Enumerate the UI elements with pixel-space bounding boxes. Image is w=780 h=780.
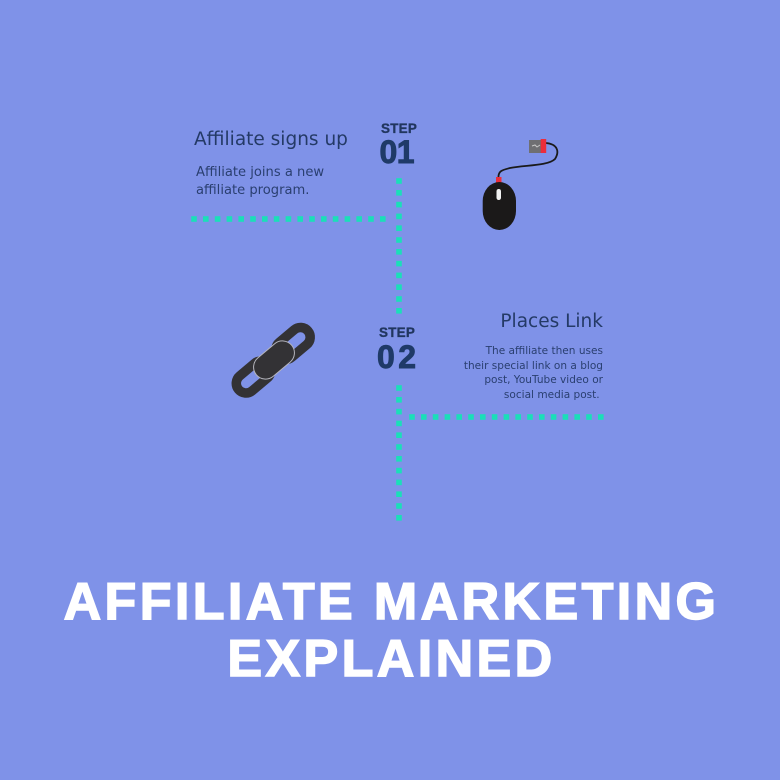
icon: chain link xyxy=(232,322,315,398)
step 1 description: Affiliate joins a new xyxy=(196,164,324,180)
title: AFFILIATE MARKETING xyxy=(64,572,719,630)
step 1 description xyxy=(196,164,324,198)
step 2 label: STEP xyxy=(379,325,415,340)
title xyxy=(64,572,719,688)
step 2 description: their special link on a blog xyxy=(464,360,603,372)
step 1 number: 01 xyxy=(380,134,414,170)
step 2 description: post, YouTube video or xyxy=(484,374,603,386)
step 2 description xyxy=(464,345,603,401)
title: EXPLAINED xyxy=(227,630,556,688)
step 1 label: STEP xyxy=(381,121,417,136)
step 2 heading: Places Link xyxy=(500,311,603,332)
step 2 description: social media post. xyxy=(504,389,600,401)
step 1 description: affiliate program. xyxy=(196,182,309,198)
step 1 heading: Affiliate signs up xyxy=(194,129,348,150)
step 2 description: The affiliate then uses xyxy=(486,345,603,357)
icon: computer mouse with USB cable xyxy=(482,139,558,230)
step 2 number: 02 xyxy=(377,339,420,375)
